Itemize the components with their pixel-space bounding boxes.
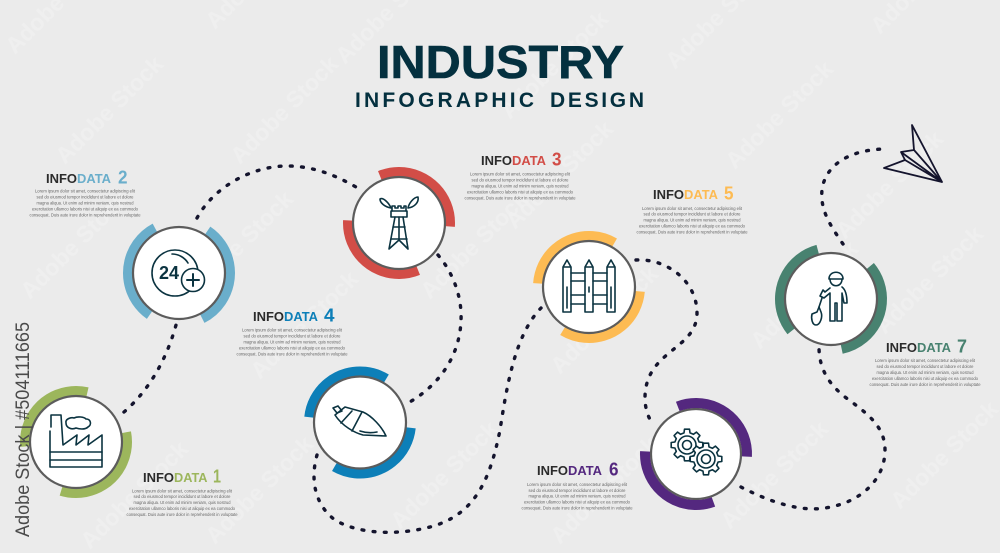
panel: step 5 fence: [534, 232, 644, 342]
text block: info data 2: magna aliqua. Ut enim ad minim veniam, quis nostrud: [36, 200, 134, 206]
panel: step 3 oil tower: [333, 157, 465, 289]
infographic canvas: Adobe Stock: [15, 186, 133, 304]
text block: info data 5: [636, 184, 748, 234]
text block: info data 6: exercitation ullamco laboris nisi ut aliquip ex ea commodo: [524, 500, 631, 504]
text block: info data 3: sed do eiusmod tempor incididunt ut labore et dolore: [472, 178, 569, 182]
text block: info data 7: 7: [957, 336, 967, 356]
text block: info data 7: INFO: [886, 340, 917, 355]
infographic canvas: Adobe Stock: [500, 116, 618, 234]
icon: worker with shovel: [812, 272, 847, 325]
text block: info data 6: INFO: [537, 463, 568, 478]
text block: info data 3: INFO: [481, 153, 512, 168]
text block: info data 5: exercitation ullamco laboris nisi ut aliquip ex ea commodo: [639, 224, 746, 228]
text block: info data 1: Lorem ipsum dolor sit amet, consectetur adipiscing elit: [132, 488, 233, 493]
text block: info data 4: 4: [324, 306, 334, 326]
text block: info data 4: exercitation ullamco laboris nisi ut aliquip ex ea commodo: [239, 346, 346, 350]
text block: info data 3: [464, 150, 576, 200]
text block: info data 3: magna aliqua. Ut enim ad minim veniam, quis nostrud: [472, 183, 569, 188]
title: INFOGRAPHIC: [355, 89, 534, 112]
icon: fence: [563, 260, 615, 312]
text block: info data 1: INFO: [143, 470, 174, 485]
text block: info data 6: [522, 460, 633, 510]
icon: factory: [50, 415, 102, 467]
text block: info data 7: consequat. Duis aute irure dolor in reprehenderit in voluptate: [870, 382, 981, 387]
text block: info data 1: consequat. Duis aute irure dolor in reprehenderit in voluptate: [126, 512, 238, 517]
icon: 24 plus: 24: [159, 263, 179, 283]
text block: info data 2: INFO: [46, 171, 77, 186]
icon: 24 plus: [152, 250, 204, 296]
text block: info data 7: sed do eiusmod tempor incididunt ut labore et dolore: [876, 364, 974, 369]
text block: info data 2: [30, 168, 141, 217]
panel: step 1 factory: [16, 382, 136, 502]
infographic canvas: Adobe Stock: [745, 236, 863, 354]
panel: step 4 boat: [304, 366, 416, 479]
title: INDUSTRY: [377, 36, 624, 88]
text block: info data 2: consequat. Duis aute irure dolor in reprehenderit in voluptate: [30, 212, 141, 217]
title: [355, 36, 644, 112]
text block: info data 4: DATA: [284, 309, 319, 324]
text block: info data 1: magna aliqua. Ut enim ad minim veniam, quis nostrud: [134, 500, 231, 505]
text block: info data 3: 3: [552, 150, 562, 170]
text block: info data 6: 6: [609, 460, 618, 480]
infographic canvas: Adobe Stock: [885, 396, 1000, 514]
text block: info data 5: Lorem ipsum dolor sit amet, consectetur adipiscing elit: [642, 206, 743, 211]
text block: info data 3: Lorem ipsum dolor sit amet, consectetur adipiscing elit: [470, 172, 571, 176]
text block: info data 7: magna aliqua. Ut enim ad minim veniam, quis nostrud: [876, 370, 974, 375]
infographic canvas: Adobe Stock: [830, 126, 948, 244]
dashed route: [124, 149, 887, 532]
stock id side label: Adobe Stock | #504111665: [13, 322, 34, 537]
infographic canvas: Adobe Stock: [385, 416, 503, 534]
text block: info data 5: consequat. Duis aute irure dolor in reprehenderit in voluptate: [636, 229, 748, 234]
text block: info data 4: [236, 306, 348, 356]
panel: step 6 gears: [630, 388, 762, 520]
text block: info data 5: DATA: [684, 187, 719, 202]
text block: info data 4: Lorem ipsum dolor sit amet, consectetur adipiscing elit: [242, 328, 343, 332]
text block: info data 2: DATA: [77, 171, 112, 186]
text block: info data 6: magna aliqua. Ut enim ad minim veniam, quis nostrud: [528, 494, 626, 499]
panel: step 7 worker: [759, 227, 903, 371]
infographic canvas: Adobe Stock: [720, 56, 838, 174]
text block: info data 1: sed do eiusmod tempor incididunt ut labore et dolore: [134, 494, 231, 499]
text block: info data 1: [126, 466, 238, 517]
panel: step 2 24 plus: [108, 202, 250, 344]
infographic canvas: Adobe Stock: [75, 436, 193, 553]
infographic canvas: Adobe Stock: [545, 431, 663, 549]
text block: info data 4: consequat. Duis aute irure dolor in reprehenderit in voluptate: [236, 351, 348, 356]
infographic canvas: Adobe Stock: [50, 51, 168, 169]
text block: info data 6: sed do eiusmod tempor incididunt ut labore et dolore: [528, 488, 626, 493]
text block: info data 6: consequat. Duis aute irure dolor in reprehenderit in voluptate: [522, 506, 633, 510]
text block: info data 1: DATA: [174, 470, 208, 485]
text block: info data 4: INFO: [253, 309, 284, 324]
infographic canvas: Adobe Stock: [180, 186, 298, 304]
icon: gears: [671, 429, 722, 475]
infographic canvas: Adobe Stock: [415, 186, 533, 304]
title: DESIGN: [550, 89, 644, 112]
infographic canvas: Adobe Stock: [495, 6, 613, 124]
text block: info data 3: consequat. Duis aute irure dolor in reprehenderit in voluptate: [464, 195, 576, 200]
icon: paper plane: [884, 125, 942, 182]
text block: info data 3: exercitation ullamco laboris nisi ut aliquip ex ea commodo: [467, 189, 574, 194]
text block: info data 6: Lorem ipsum dolor sit amet, consectetur adipiscing elit: [527, 482, 628, 487]
text block: info data 2: 2: [118, 168, 128, 188]
infographic canvas: Adobe Stock: [545, 261, 663, 379]
text block: info data 5: INFO: [653, 187, 684, 202]
text block: info data 5: magna aliqua. Ut enim ad minim veniam, quis nostrud: [644, 218, 741, 222]
text block: info data 7: Lorem ipsum dolor sit amet, consectetur adipiscing elit: [875, 358, 976, 363]
text block: info data 1: 1: [213, 466, 221, 486]
text block: info data 2: Lorem ipsum dolor sit amet, consectetur adipiscing elit: [35, 188, 136, 194]
text block: info data 4: magna aliqua. Ut enim ad minim veniam, quis nostrud: [244, 340, 341, 344]
text block: info data 7: exercitation ullamco laboris nisi ut aliquip ex ea commodo: [872, 376, 979, 381]
text block: info data 5: sed do eiusmod tempor incididunt ut labore et dolore: [644, 212, 741, 217]
text block: info data 7: [870, 336, 981, 387]
infographic canvas: Adobe Stock: [245, 266, 363, 384]
text block: info data 2: exercitation ullamco laboris nisi ut aliquip ex ea commodo: [32, 206, 139, 211]
infographic canvas: Adobe Stock: [225, 51, 343, 169]
text block: info data 1: exercitation ullamco laboris nisi ut aliquip ex ea commodo: [129, 506, 236, 511]
infographic canvas: Adobe Stock: [200, 431, 318, 549]
icon: oil tower: [380, 197, 418, 249]
text block: info data 2: sed do eiusmod tempor incididunt ut labore et dolore: [36, 194, 134, 200]
text block: info data 6: DATA: [568, 463, 603, 478]
text block: info data 4: sed do eiusmod tempor incididunt ut labore et dolore: [244, 334, 341, 338]
text block: info data 7: DATA: [917, 340, 952, 355]
infographic canvas: Adobe Stock: [870, 221, 988, 339]
infographic canvas: Adobe Stock: [715, 416, 833, 534]
icon: boat: [333, 406, 386, 436]
text block: info data 5: 5: [724, 184, 734, 204]
text block: info data 3: DATA: [512, 153, 547, 168]
